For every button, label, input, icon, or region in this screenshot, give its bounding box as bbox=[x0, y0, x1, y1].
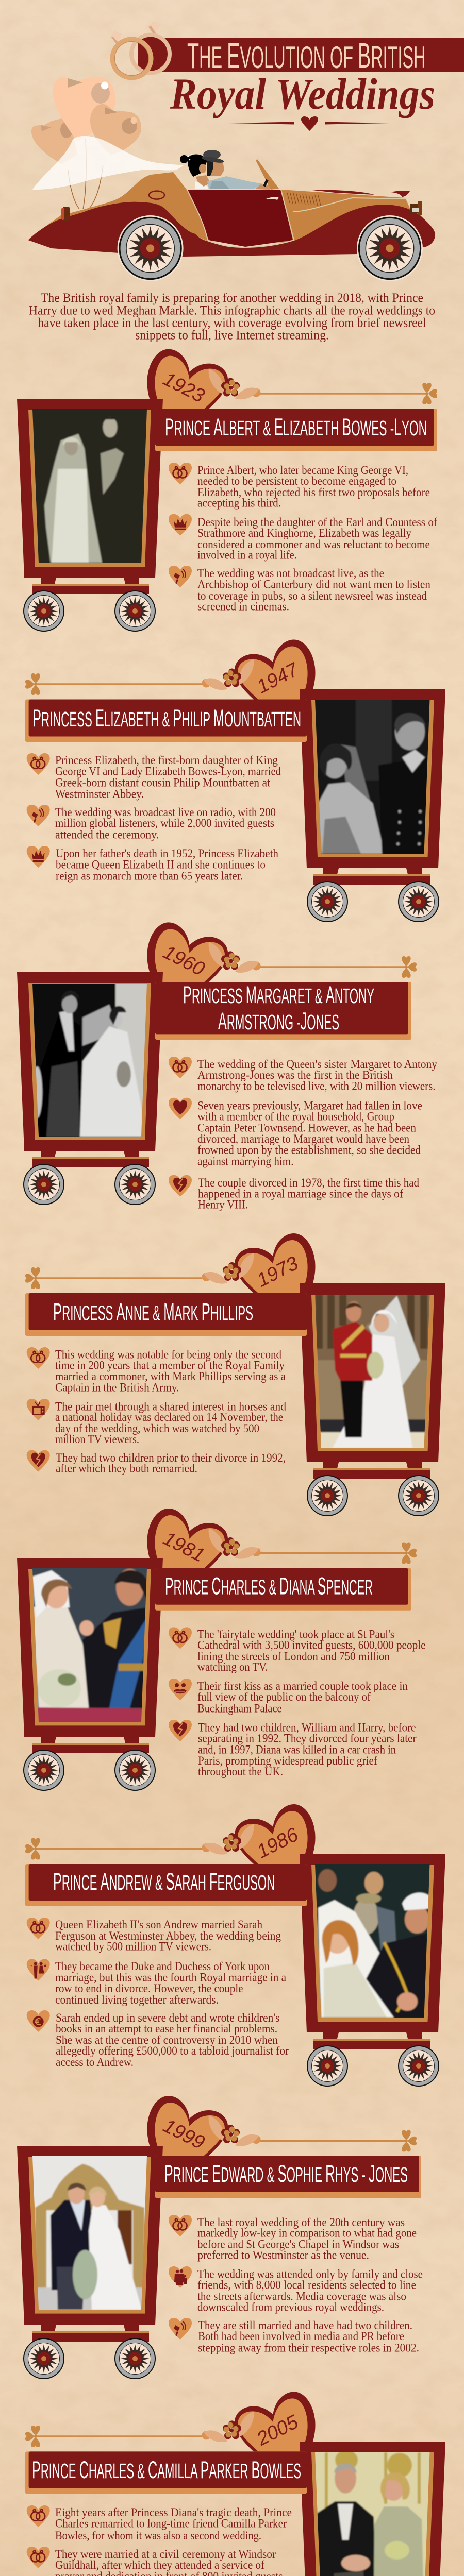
cart wheels bbox=[23, 578, 156, 632]
bullet: radio: attended the ceremony. bbox=[55, 828, 159, 841]
bullet: debt: books in an attempt to ease her financial problems. bbox=[56, 2022, 277, 2035]
bullet: Queen: reign as monarch more than 65 years later. bbox=[56, 869, 243, 882]
bullet: fairytale: Cathedral with 3,500 invited guests, 600,000 people bbox=[197, 1638, 426, 1651]
bullet: debt: access to Andrew. bbox=[56, 2056, 134, 2069]
bullet: televised: monarchy to be televised live, with 20 million viewers. bbox=[197, 1079, 435, 1092]
year heart 1947: 1947 bbox=[253, 658, 303, 698]
bullet: radio bbox=[27, 805, 276, 841]
bullet: remarried: Eight years after Princess Diana's tragic death, Prince bbox=[55, 2506, 292, 2519]
panel: 1947 Princess Elizabeth and Philip Mountbatten bbox=[25, 640, 445, 922]
cart wheels bbox=[23, 1737, 156, 1791]
year heart 1960: 1960 bbox=[160, 941, 208, 980]
cart wheels bbox=[307, 2032, 439, 2087]
bullet: divorce: happened in a royal marriage since the days of bbox=[198, 1187, 403, 1200]
bullet: Westminster: Queen Elizabeth II's son Andrew married Sarah bbox=[55, 1918, 262, 1931]
bullet: TV viewers: The pair met through a shared interest in horses and bbox=[55, 1400, 286, 1413]
bullet: Queen: Upon her father's death in 1952, Princess Elizabeth bbox=[56, 847, 278, 860]
bullet: commoner bbox=[27, 1347, 286, 1394]
bullet: fairytale: watching on TV. bbox=[197, 1660, 268, 1673]
bullet: Peter Townsend: Captain Peter Townsend. However, as he had been bbox=[197, 1121, 416, 1134]
year heart 1981: 1981 bbox=[160, 1528, 208, 1567]
bullet: first kiss: Buckingham Palace bbox=[197, 1702, 282, 1715]
bullet: Duke and Duchess bbox=[27, 1959, 286, 2006]
heading bbox=[25, 2451, 307, 2494]
introduction text bbox=[29, 291, 435, 342]
bullet: Westminster: Greek-born distant cousin Philip Mountbatten at bbox=[55, 776, 271, 789]
bullet: Duke and Duchess: They became the Duke and Duchess of York upon bbox=[55, 1960, 270, 1973]
cart with photo bbox=[17, 972, 163, 1151]
bullet: separation: Paris, prompting widespread public grief bbox=[198, 1754, 377, 1767]
bullet: TV viewers: a national holiday was declared on 14 November, the bbox=[55, 1411, 283, 1423]
bullet: family and friends: The wedding was attended only by family and close bbox=[197, 2268, 423, 2281]
bullet: Westminster bbox=[27, 753, 281, 801]
bullet: fairytale bbox=[169, 1627, 426, 1673]
year heart 1986 bbox=[25, 1804, 316, 1864]
bullet: separation: They had two children, William and Harry, before bbox=[198, 1721, 416, 1734]
year heart 1923 bbox=[147, 349, 437, 409]
bullet: family and friends: the streets afterwards. Media coverage was also bbox=[197, 2290, 406, 2303]
cart wheels bbox=[23, 2325, 156, 2379]
bullet: Westminster: George VI and Lady Elizabeth Bowes-Lyon, married bbox=[55, 765, 281, 778]
bullet: commoner: married a commoner, with Mark Phillips serving as a bbox=[55, 1370, 286, 1383]
bullet: separation bbox=[169, 1720, 417, 1778]
bullet: civil ceremony: They were married at a civil ceremony at Windsor bbox=[55, 2548, 276, 2561]
bullet: divorce bbox=[27, 1450, 286, 1475]
bullet: persistent proposals: Prince Albert, who later became King George VI, bbox=[197, 464, 408, 477]
bullet: fairytale: The 'fairytale wedding' took place at St Paul's bbox=[197, 1628, 394, 1641]
bullet: radio: million global listeners, while 2,000 invited guests bbox=[55, 817, 274, 829]
bullet: Peter Townsend: against marrying him. bbox=[197, 1155, 294, 1167]
bullet: commoner: involved in a royal life. bbox=[197, 548, 297, 561]
bullet: Peter Townsend: divorced, marriage to Margaret would have been bbox=[197, 1132, 409, 1145]
bullet: commoner: Captain in the British Army. bbox=[55, 1381, 179, 1394]
bullet: separation: separating in 1992. They divorced four years later bbox=[198, 1732, 417, 1745]
bullet: persistent proposals bbox=[169, 463, 430, 509]
bullet: debt: Sarah ended up in severe debt and wrote children's bbox=[56, 2011, 280, 2024]
bullet: debt bbox=[27, 2010, 289, 2069]
cart with photo bbox=[300, 1283, 445, 1462]
bullet: media and PR: Both had been involved in media and PR before bbox=[198, 2330, 404, 2343]
bullet: divorce: The couple divorced in 1978, the first time this had bbox=[198, 1176, 419, 1189]
bullet: commoner: time in 200 years that a member of the Royal Family bbox=[55, 1359, 285, 1372]
year heart 1999 bbox=[147, 2096, 417, 2156]
bullet: commoner: This wedding was notable for being only the second bbox=[55, 1348, 281, 1361]
bullet: family and friends: downscaled from previous royal weddings. bbox=[197, 2300, 384, 2313]
bullet: low-key: preferred to Westminster as the venue. bbox=[197, 2248, 369, 2262]
bullet: debt: allegedly offering £500,000 to a tabloid journalist for bbox=[56, 2044, 289, 2057]
bullet: persistent proposals: needed to be persistent to become engaged to bbox=[197, 474, 396, 487]
year heart 1973 bbox=[25, 1233, 316, 1293]
bullet: Peter Townsend: with a member of the royal household, Group bbox=[197, 1110, 394, 1123]
bullet: remarried bbox=[27, 2505, 292, 2542]
cart with photo bbox=[17, 399, 163, 578]
bullet: low-key: before and St George's Chapel in Windsor was bbox=[197, 2238, 399, 2251]
heading bbox=[155, 981, 411, 1040]
bullet: debt: She was at the centre of controversy in 2010 when bbox=[56, 2033, 278, 2046]
heading bbox=[155, 409, 437, 451]
cart with photo bbox=[17, 1558, 163, 1737]
bullet: Westminster: watched by 500 million TV viewers. bbox=[55, 1940, 211, 1953]
bullet: not broadcast: screened in cinemas. bbox=[197, 600, 289, 613]
year heart 1923: 1923 bbox=[160, 368, 208, 407]
bullet: separation: and, in 1997, Diana was killed in a car crash in bbox=[198, 1743, 396, 1756]
bullet: media and PR: stepping away from their respective roles in 2002. bbox=[198, 2341, 419, 2354]
heading: PRINCE ALBERT & ELIZABETH BOWES -LYON bbox=[165, 413, 427, 440]
bullet: family and friends bbox=[169, 2266, 423, 2313]
bullet: remarried: Bowles, for whom it was also a second wedding. bbox=[55, 2529, 261, 2542]
bullet: separation: throughout the UK. bbox=[198, 1765, 283, 1778]
bullet: divorce bbox=[169, 1175, 419, 1211]
year heart 1973: 1973 bbox=[253, 1252, 302, 1292]
bullet: Peter Townsend: frowned upon by the establishment, so she decided bbox=[197, 1143, 421, 1156]
illustration: bride and groom in car bbox=[180, 150, 270, 190]
bullet: commoner bbox=[169, 514, 437, 561]
bullet: Duke and Duchess: marriage, but this was the fourth Royal marriage in a bbox=[55, 1971, 286, 1984]
bullet: first kiss: full view of the public on the balcony of bbox=[197, 1690, 371, 1703]
bullet: commoner: considered a commoner and was reluctant to become bbox=[197, 538, 430, 551]
cart with photo bbox=[300, 2442, 445, 2576]
panel: 1981 Prince Charles and Diana Spencer bbox=[17, 1509, 426, 1791]
cart wheels bbox=[307, 1462, 439, 1516]
bullet: televised bbox=[169, 1057, 437, 1092]
title ribbon: THE EVOLUTION OF BRITISH bbox=[187, 36, 426, 76]
year heart 2005: 2005 bbox=[253, 2411, 302, 2450]
bullet: remarried: Charles remarried to long-time friend Camilla Parker bbox=[55, 2517, 287, 2530]
year heart 1986: 1986 bbox=[253, 1824, 302, 1863]
bullet: Westminster: Princess Elizabeth, the first-born daughter of King bbox=[55, 754, 278, 767]
bullet: low-key bbox=[169, 2215, 417, 2262]
heading bbox=[25, 1864, 307, 1906]
bullet: Peter Townsend bbox=[169, 1098, 422, 1167]
bullet: fairytale: lining the streets of London and 750 million bbox=[197, 1650, 390, 1663]
bullet: Westminster bbox=[27, 1918, 281, 1953]
bullet: first kiss: Their first kiss as a married couple took place in bbox=[197, 1680, 408, 1692]
bullet: Queen: became Queen Elizabeth II and she continues to bbox=[56, 858, 266, 871]
script title: Royal Weddings: Royal Weddings bbox=[170, 69, 435, 118]
cart with photo bbox=[17, 2146, 163, 2325]
heading bbox=[155, 1568, 411, 1611]
bullet: televised: The wedding of the Queen's sister Margaret to Antony bbox=[197, 1058, 437, 1071]
bullet: commoner: Despite being the daughter of the Earl and Countess of bbox=[197, 516, 437, 529]
illustration: vintage wedding car bbox=[28, 159, 435, 281]
bullet: not broadcast: to coverage in pubs, so a silent newsreel was instead bbox=[197, 589, 427, 602]
panel: 1986 Prince Andrew and Sarah Ferguson bbox=[25, 1804, 445, 2087]
bullet: TV viewers bbox=[27, 1399, 286, 1446]
cart wheels bbox=[23, 1151, 156, 1205]
bullet: Peter Townsend: Seven years previously, Margaret had fallen in love bbox=[197, 1099, 422, 1112]
bullet: media and PR bbox=[169, 2318, 419, 2354]
panel: 1999 Prince Edward and Sophie Rhys-Jones bbox=[17, 2096, 423, 2379]
divider with heart bbox=[229, 116, 389, 131]
panel: 2005 Prince Charles and Camilla Parker Bowles bbox=[25, 2392, 445, 2576]
panel: 1960 Princess Margaret and Antony Armstrong-Jones bbox=[17, 922, 437, 1211]
heading bbox=[155, 2156, 421, 2198]
bullet: Westminster: Westminster Abbey. bbox=[55, 788, 144, 801]
heading: PRINCESS ELIZABETH & PHILIP MOUNTBATTEN bbox=[32, 704, 301, 732]
bullet: Duke and Duchess: continued living together afterwards. bbox=[55, 1993, 219, 2006]
bullet: low-key: The last royal wedding of the 20th century was bbox=[197, 2216, 405, 2229]
bullet: low-key: markedly low-key in comparison to what had gone bbox=[197, 2227, 417, 2240]
heading: ARMSTRONG -JONES bbox=[218, 1007, 339, 1035]
bullet: TV viewers: million TV viewers. bbox=[55, 1433, 139, 1446]
bullet: family and friends: friends, with 8,000 local residents selected to line bbox=[197, 2278, 416, 2291]
bullet: divorce: Henry VIII. bbox=[198, 1198, 248, 1211]
year heart 1960 bbox=[147, 922, 417, 982]
year heart 1947 bbox=[25, 640, 316, 700]
bullet: Westminster: Ferguson at Westminster Abbey, the wedding being bbox=[55, 1929, 281, 1942]
bullet: Queen bbox=[27, 846, 278, 882]
cart with photo bbox=[300, 689, 445, 868]
heading bbox=[25, 700, 307, 742]
bullet: not broadcast: Archbishop of Canterbury did not want men to listen bbox=[197, 578, 430, 591]
bullet: not broadcast bbox=[169, 566, 430, 613]
bullet: divorce: after which they both remarried. bbox=[56, 1462, 197, 1475]
heading: PRINCESS ANNE & MARK PHILLIPS bbox=[53, 1298, 253, 1325]
bullet: Duke and Duchess: row to end in divorce. However, the couple bbox=[55, 1982, 243, 1995]
bullet: TV viewers: day of the wedding, which was watched by 500 bbox=[55, 1422, 259, 1435]
panel: 1923 Prince Albert and Elizabeth Bowes-Lyon bbox=[17, 349, 437, 632]
introduction text: Harry due to wed Meghan Markle. This infographic charts all the royal weddings to bbox=[29, 304, 435, 317]
introduction text: snippets to full, live Internet streaming. bbox=[135, 329, 329, 342]
bullet: first kiss bbox=[169, 1679, 408, 1715]
bullet: radio: The wedding was broadcast live on radio, with 200 bbox=[55, 806, 276, 819]
year heart 2005 bbox=[25, 2392, 316, 2451]
heading bbox=[25, 1293, 307, 1336]
bullet: persistent proposals: accepting his third. bbox=[197, 496, 281, 509]
bullet: media and PR: They are still married and have had two children. bbox=[198, 2319, 412, 2332]
cart wheels bbox=[307, 868, 439, 922]
bullet: televised: Armstrong-Jones was the first in the British bbox=[197, 1069, 393, 1081]
heading: PRINCE ANDREW & SARAH FERGUSON bbox=[53, 1868, 275, 1895]
year heart 1999: 1999 bbox=[160, 2115, 208, 2154]
header: title, rings and car bbox=[28, 22, 464, 342]
bullet: persistent proposals: Elizabeth, who rejected his first two proposals before bbox=[197, 486, 430, 499]
introduction text: The British royal family is preparing for another wedding in 2018, with Prince bbox=[41, 291, 423, 305]
bullet: civil ceremony bbox=[27, 2547, 286, 2576]
cart with photo bbox=[300, 1854, 445, 2032]
bullet: not broadcast: The wedding was not broadcast live, as the bbox=[197, 567, 384, 580]
heading: PRINCE CHARLES & CAMILLA PARKER BOWLES bbox=[32, 2456, 301, 2483]
bullet: commoner: Strathmore and Kinghorne, Elizabeth was legally bbox=[197, 527, 411, 539]
panel: 1973 Princess Anne and Mark Phillips bbox=[25, 1233, 445, 1516]
year heart 1981 bbox=[147, 1509, 417, 1568]
bullet: divorce: They had two children prior to their divorce in 1992, bbox=[56, 1451, 286, 1464]
heading: PRINCE EDWARD & SOPHIE RHYS - JONES bbox=[164, 2160, 408, 2187]
icon: heart balloons and veil bbox=[31, 77, 184, 209]
introduction text: have taken place in the last century, with coverage evolving from brief newsreel bbox=[38, 316, 426, 330]
heading: PRINCE CHARLES & DIANA SPENCER bbox=[165, 1572, 373, 1599]
heading: PRINCESS MARGARET & ANTONY bbox=[183, 981, 374, 1008]
bullet: civil ceremony: Guildhall, after which they attended a service of bbox=[55, 2558, 264, 2571]
icon: wedding rings bbox=[110, 22, 170, 78]
